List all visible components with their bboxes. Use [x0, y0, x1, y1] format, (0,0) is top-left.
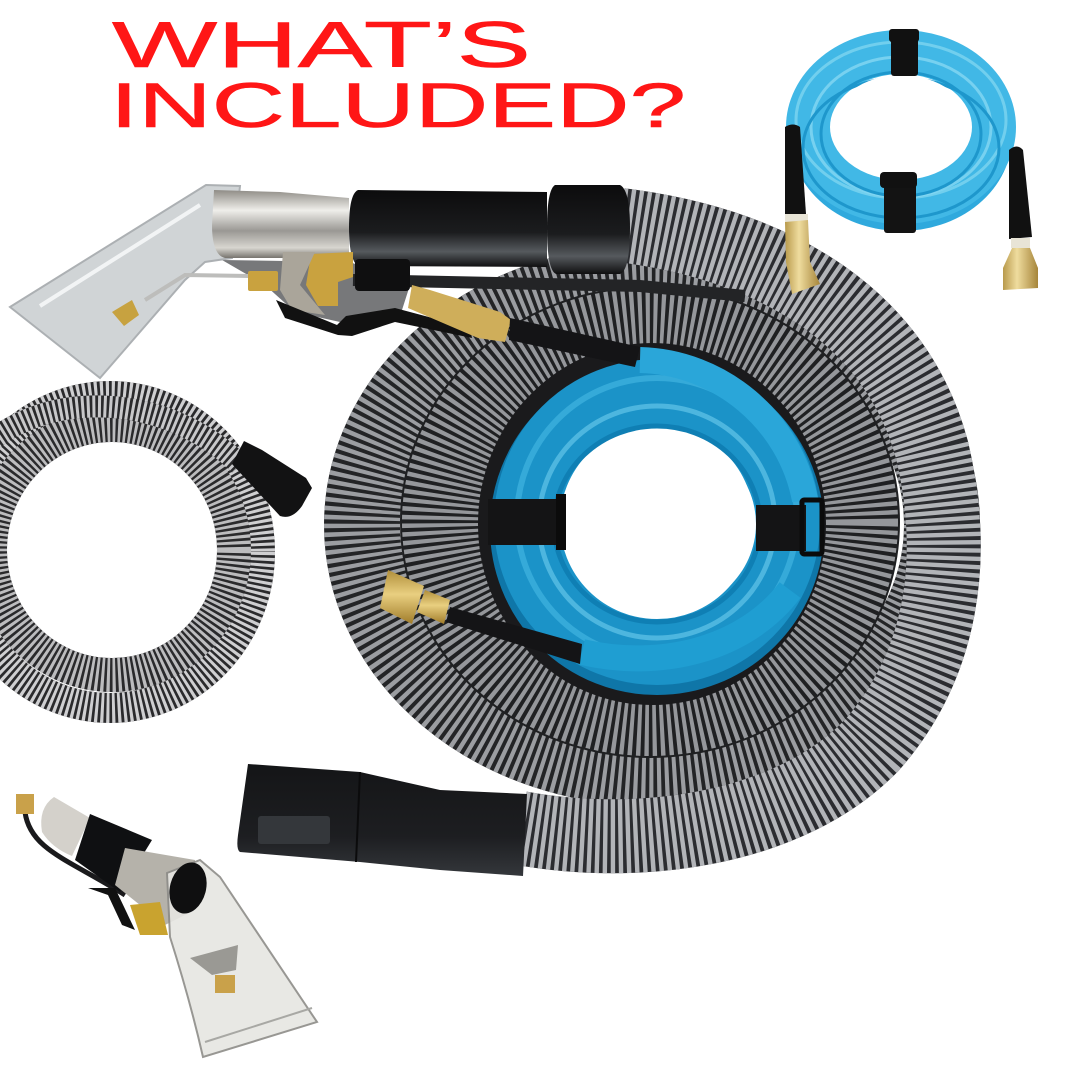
clear head [167, 860, 317, 1057]
blue hose ends [640, 360, 805, 500]
nozzle [215, 975, 235, 993]
main vacuum hose coil [362, 225, 944, 836]
black grip [509, 318, 640, 367]
brass coupling [408, 285, 511, 342]
small coil right sleeve and brass fitting [1003, 146, 1038, 290]
lever [88, 888, 135, 930]
opening [164, 858, 212, 918]
small coil top strap [889, 29, 919, 76]
blue water hose coil [517, 360, 805, 668]
coil strap right [756, 500, 822, 554]
small coil bottom strap [880, 172, 917, 233]
lever [276, 300, 472, 338]
outer hose to gun and coupler [520, 225, 944, 836]
small blue hose coil [796, 42, 1006, 218]
title: WHAT’S [112, 8, 531, 81]
small grey vacuum hose coil [0, 396, 260, 708]
lower water fitting [380, 570, 582, 664]
inner hose loop [442, 328, 858, 716]
water line [25, 812, 125, 895]
lower spray wand tool [16, 794, 317, 1057]
brass elbow [306, 252, 353, 306]
handle collar [547, 185, 630, 274]
lower vacuum coupler [237, 764, 527, 876]
small coil left sleeve and brass fitting [785, 124, 820, 294]
title: INCLUDED? [110, 71, 686, 141]
black sleeve [75, 814, 152, 892]
chrome body [115, 848, 195, 925]
white tube [41, 797, 90, 856]
title [110, 8, 686, 141]
outer left hose loop [362, 282, 942, 768]
chrome tube [212, 190, 349, 258]
small coil vacuum coupling [232, 441, 312, 517]
white centre hole [564, 434, 756, 614]
clip [190, 945, 238, 975]
upper spray wand tool [10, 185, 745, 378]
coil strap left [488, 494, 566, 550]
brass parts [130, 902, 168, 935]
nozzle [112, 300, 139, 326]
dark shadow between hose and blue coil [489, 354, 815, 694]
clear head [10, 185, 240, 378]
grey plate [222, 260, 410, 322]
water line [353, 280, 745, 296]
black handle [349, 190, 547, 267]
